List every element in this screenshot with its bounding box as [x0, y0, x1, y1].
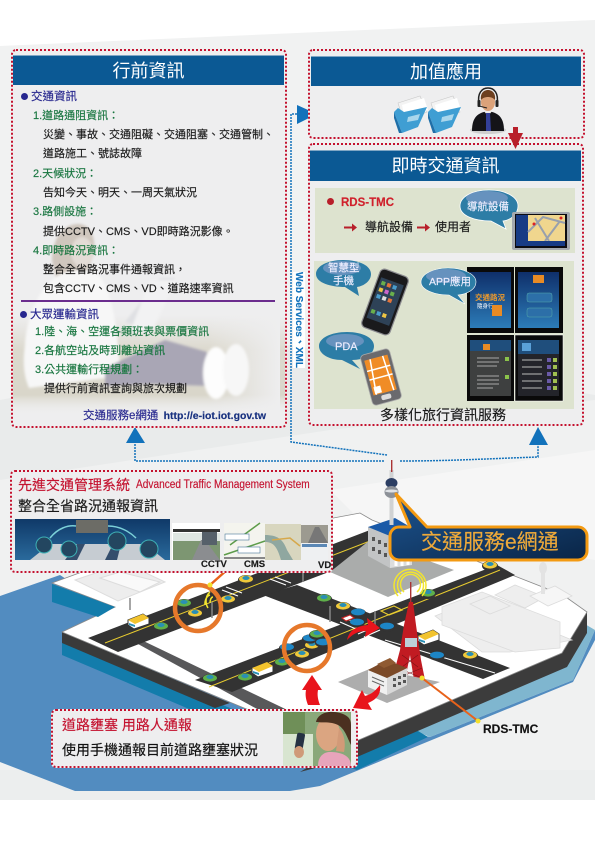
callout: road congestion report	[51, 709, 358, 768]
road C	[263, 585, 510, 679]
highway office building	[338, 658, 440, 703]
transit item 3: 3.公共運輸行程規劃：	[35, 364, 143, 376]
item 1 text line 2: 道路施工、號誌故障	[43, 148, 142, 160]
item 1 text line 1: 災變、事故、交通阻礙、交通阻塞、交通管制、	[43, 129, 274, 141]
header: value-added applications	[311, 56, 581, 86]
orange highlight circles	[175, 585, 330, 671]
CCTV leader line	[208, 566, 230, 588]
building with tower	[330, 460, 454, 597]
bubble label: PDA: PDA	[335, 341, 358, 353]
icon: folder 2	[428, 96, 461, 133]
screenshot: CCTV	[172, 523, 220, 560]
signal rings and antenna	[205, 569, 426, 608]
bubble label: navigation device: 導航設備	[467, 201, 509, 213]
screenshot: CMS map	[224, 523, 265, 560]
header: pre-trip information	[13, 55, 284, 85]
bullet: traffic info	[21, 93, 28, 100]
text: user: 使用者	[435, 220, 471, 234]
blue arrowheads	[126, 105, 548, 445]
heading: public transit information: 大眾運輸資訊	[30, 309, 99, 321]
app screen 4	[515, 335, 563, 401]
text: Web Services、XML: Web Services、XML	[293, 272, 304, 368]
item 2 text: 告知今天、明天、一周天氣狀況	[43, 187, 197, 199]
item 4 text line 1: 整合全省路況事件通報資訊，	[43, 264, 186, 276]
panel: value-added applications	[308, 49, 585, 139]
item 1: 1.道路通阻資訊：	[33, 110, 119, 122]
bubble label: APP: APP應用	[429, 276, 471, 288]
ATMS title: 先進交通管理系統	[18, 477, 130, 493]
app screen 2	[515, 267, 563, 333]
item 2: 2.天候狀況：	[33, 168, 97, 180]
label: VD: VD	[318, 560, 331, 571]
header: real-time traffic information: 即時交通資訊	[392, 156, 500, 176]
ATMS subtitle: 整合全省路況通報資訊	[18, 498, 158, 514]
road A	[88, 530, 400, 652]
icon: folder 1	[394, 96, 428, 133]
red broadcast tower	[392, 602, 425, 680]
cars	[128, 561, 498, 684]
transit item 2: 2.各航空站及時到離站資訊	[35, 345, 165, 357]
label: CCTV: CCTV	[201, 559, 227, 570]
panel: real-time traffic information	[308, 143, 584, 426]
bubble label: smartphone: 智慧型	[328, 262, 360, 274]
transit item 3 text: 提供行前資訊查詢與旅次規劃	[44, 383, 187, 395]
diagram: system overview	[15, 519, 170, 560]
red arrows	[302, 618, 380, 710]
road B	[195, 565, 515, 692]
label: RDS-TMC: RDS-TMC	[483, 722, 538, 736]
icon: operator with headset	[470, 88, 506, 134]
screenshot: VD	[265, 524, 328, 560]
transit item 1: 1.陸、海、空運各類班表與票價資訊	[35, 326, 209, 338]
RDS-TMC leader line	[420, 676, 480, 724]
heading: RDS-TMC: RDS-TMC	[341, 197, 394, 209]
app screen 3	[467, 335, 514, 401]
vertical label: Web Services XML	[293, 272, 305, 368]
callout text: 交通服務e網通: 交通服務e網通	[421, 531, 559, 554]
bubble label: phone: 手機	[333, 275, 354, 287]
data flow dotted lines	[135, 114, 538, 461]
caption: diversified travel info services: 多樣化旅行資訊服務	[380, 407, 506, 423]
callout title: 道路壅塞 用路人通報	[62, 717, 192, 733]
bullet: RDS-TMC	[327, 198, 334, 205]
item 4: 4.即時路況資訊：	[33, 245, 119, 257]
item 4 text line 2: 包含CCTV、CMS、VD、道路速率資訊	[43, 283, 234, 295]
app screen 1: 交通路況	[475, 292, 505, 302]
panel: pre-trip information	[11, 49, 287, 428]
label: CMS: CMS	[244, 559, 265, 570]
bullet: transit info	[20, 311, 27, 318]
item 3 text: 提供CCTV、CMS、VD即時路況影像。	[43, 226, 234, 238]
app screen 1: 隨身行	[477, 302, 494, 310]
faded laptop user photo	[13, 223, 285, 406]
callout text: 使用手機通報目前道路壅塞狀況	[62, 742, 258, 758]
ATMS English title: Advanced Traffic Management System	[136, 479, 310, 491]
item 3: 3.路側設施：	[33, 206, 97, 218]
text: navigation device: 導航設備	[365, 220, 413, 234]
city blocks	[435, 585, 572, 652]
box: mobile services	[314, 261, 574, 409]
heading: traffic information: 交通資訊	[31, 91, 77, 103]
box: RDS-TMC	[315, 188, 575, 253]
header: value-added applications: 加值應用	[410, 62, 482, 82]
website footer: 交通服務e網通 http://e-iot.iot.gov.tw	[83, 410, 266, 422]
header: real-time traffic information	[310, 150, 581, 181]
panel: advanced traffic management system	[10, 470, 333, 573]
app screen 1	[467, 267, 514, 333]
header: pre-trip information: 行前資訊	[112, 61, 184, 81]
